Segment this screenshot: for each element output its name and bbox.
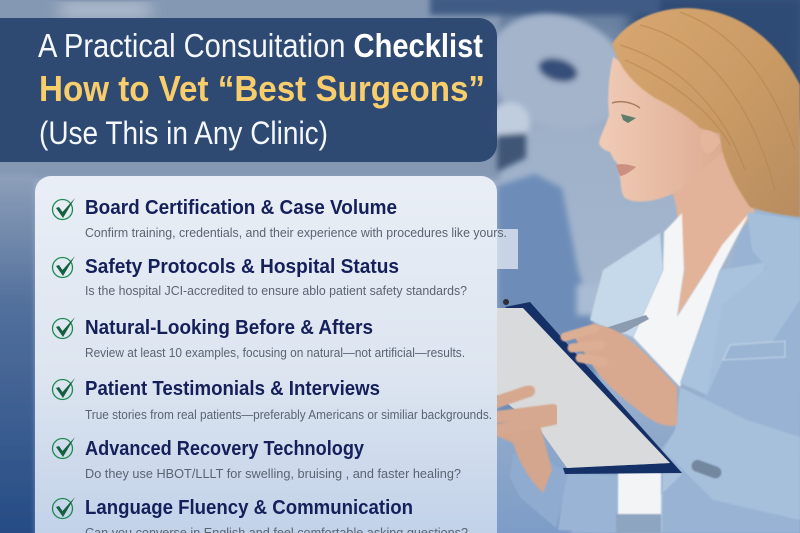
pen: [574, 315, 649, 342]
header panel: [0, 18, 497, 162]
face: [599, 57, 725, 202]
item 1: Confirm training, credentials, and their experience with procedures like yours.: [85, 226, 507, 240]
item 1: [52, 197, 507, 240]
item 5: [52, 437, 461, 481]
eye, brow, lips and ear: [612, 102, 720, 176]
item 5: Advanced Recovery Technology: [85, 438, 365, 460]
surgeon figure: [490, 102, 601, 430]
title line 2: How to Vet “Best Surgeons”: [39, 68, 485, 109]
jacket: [510, 212, 800, 533]
item 3: [52, 317, 465, 360]
item 6: Language Fluency & Communication: [85, 497, 413, 519]
item 3: Natural-Looking Before & Afters: [85, 317, 373, 339]
title line 1: A Practical Consuitation Checklist: [38, 27, 483, 64]
item 1: Board Certification & Case Volume: [85, 197, 397, 219]
item 2: Is the hospital JCI-accredited to ensure ablo patient safety standards?: [85, 284, 467, 298]
item 4: [52, 378, 492, 422]
item 4: Patient Testimonials & Interviews: [85, 378, 380, 400]
white shirt: [616, 212, 750, 533]
item 5: Do they use HBOT/LLLT for swelling, bruising , and faster healing?: [85, 467, 461, 481]
title line 3: (Use This in Any Clinic): [39, 115, 328, 151]
item 4: True stories from real patients—preferably Americans or similiar backgrounds.: [85, 408, 492, 422]
right hand: [565, 325, 677, 426]
hair strands: [620, 12, 795, 190]
right sleeve with buttons: [663, 387, 800, 520]
checklist panel: [35, 176, 518, 533]
woman with clipboard: [497, 8, 800, 533]
hair: [612, 8, 800, 217]
clipboard: [497, 299, 682, 474]
lapels and pocket: [590, 212, 800, 395]
item 6: [52, 497, 468, 533]
surgical lamp: [471, 0, 645, 149]
left hand: [497, 391, 554, 493]
item 3: Review at least 10 examples, focusing on natural—not artificial—results.: [85, 346, 465, 360]
item 2: [52, 256, 467, 298]
neck and chest: [670, 145, 755, 317]
item 2: Safety Protocols & Hospital Status: [85, 256, 399, 278]
